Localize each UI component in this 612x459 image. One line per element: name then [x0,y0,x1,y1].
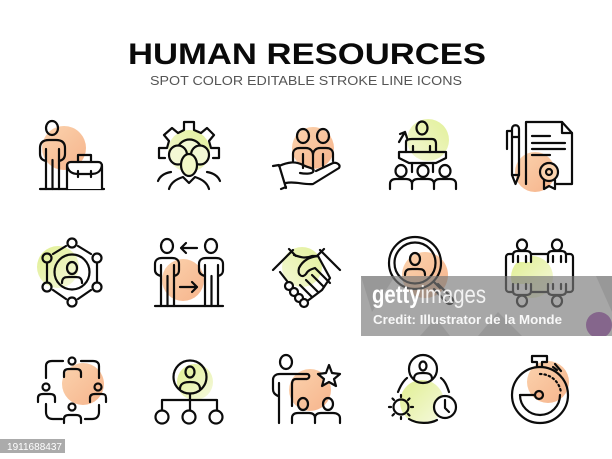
icon: people held in hand [273,127,340,189]
icon: person network [37,238,102,306]
image id badge: 1911688437 [7,441,62,453]
icon: person search magnifier [389,237,453,304]
icon: team in a cycle [38,358,106,423]
icon: team inside gear [158,122,220,189]
icon: organization hierarchy [156,360,222,424]
watermark band [361,276,612,338]
icon: person with briefcase [40,121,104,189]
icon: two people exchanging [155,239,223,306]
icon: person with sun and clock cycle [389,355,456,424]
icon: stopwatch [512,356,569,423]
title: HUMAN RESOURCES [128,38,486,71]
watermark purple dot [586,312,612,338]
subtitle: SPOT COLOR EDITABLE STROKE LINE ICONS [150,73,462,88]
icon: meeting table [506,240,573,306]
icon: presenter and audience [390,119,456,189]
icon: leader pointing to star [273,355,340,423]
watermark logo text: gettyimages [372,281,486,309]
icon: handshake [273,247,340,307]
icon: contract document and pen [507,122,572,192]
watermark credit text: Credit: Illustrator de la Monde [373,312,562,327]
